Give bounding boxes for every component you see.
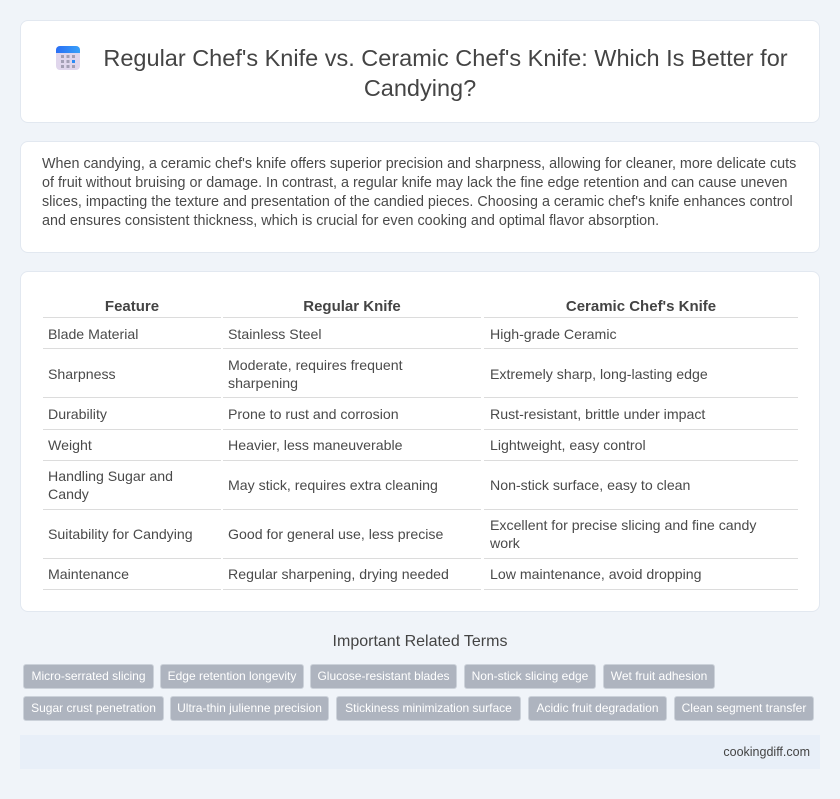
heading: related terms: Important Related Terms [333, 633, 507, 650]
row: weight: Heavier, less maneuverable [228, 437, 402, 453]
panel: title card [20, 20, 820, 123]
row: sharpness: Extremely sharp, long-lasting edge [490, 366, 708, 382]
text block: intro: slices, impacting the texture and presentation of the candied pieces. Choosing a ceramic chef's knife enhances control [42, 194, 793, 210]
related terms tags: Clean segment transfer [682, 701, 806, 715]
row: handling sugar and candy: Handling Sugar and [48, 468, 173, 484]
row: suitability for candying: Good for general use, less precise [228, 526, 443, 542]
related terms tags: Sugar crust penetration [31, 701, 156, 715]
text block: intro: of fruit without bruising or damage. In contrast, a regular knife may lack the fine edge retention and can cause uneven [42, 175, 788, 191]
table header: Ceramic Chef's Knife [566, 298, 716, 315]
related terms tags: Non-stick slicing edge [472, 669, 588, 683]
row: blade material [48, 326, 617, 342]
panel: intro text [20, 141, 820, 253]
row: handling sugar and candy: Candy [48, 486, 89, 502]
row: durability: Rust-resistant, brittle under impact [490, 406, 705, 422]
row: suitability for candying [48, 517, 756, 551]
row: durability: Durability [48, 406, 107, 422]
footer [20, 735, 820, 769]
panel: comparison table [20, 271, 820, 612]
row: maintenance: Low maintenance, avoid dropping [490, 566, 701, 582]
row: maintenance: Maintenance [48, 566, 129, 582]
related terms tags: Stickiness minimization surface [345, 701, 512, 715]
row: sharpness [48, 357, 708, 391]
row: weight: Weight [48, 437, 92, 453]
related terms tags: Ultra-thin julienne precision [177, 701, 322, 715]
row: suitability for candying: Suitability for Candying [48, 526, 193, 542]
title: Candying? [364, 75, 476, 101]
row: handling sugar and candy: Non-stick surface, easy to clean [490, 477, 690, 493]
row: blade material: Blade Material [48, 326, 138, 342]
row: sharpness: Moderate, requires frequent [228, 357, 403, 373]
title: Regular Chef's Knife vs. Ceramic Chef's Knife: Which Is Better for [103, 45, 788, 71]
footer: cookingdiff.com [723, 745, 810, 759]
row: handling sugar and candy: May stick, requires extra cleaning [228, 477, 438, 493]
table header [105, 298, 716, 315]
text block: intro: When candying, a ceramic chef's knife offers superior precision and sharpness, allowing for cleaner, more delicate cuts [42, 156, 796, 172]
row: maintenance: Regular sharpening, drying needed [228, 566, 449, 582]
row: blade material: Stainless Steel [228, 326, 322, 342]
table header: Feature [105, 298, 159, 315]
row: durability [48, 406, 706, 422]
row: weight: Lightweight, easy control [490, 437, 646, 453]
row: weight [48, 437, 646, 453]
row: durability: Prone to rust and corrosion [228, 406, 399, 422]
related terms tags: Glucose-resistant blades [317, 669, 450, 683]
row: handling sugar and candy [48, 468, 690, 502]
comparison table [43, 298, 798, 590]
row: sharpness: sharpening [228, 375, 298, 391]
row: sharpness: Sharpness [48, 366, 116, 382]
related terms tags: Acidic fruit degradation [536, 701, 659, 715]
related terms tags: Micro-serrated slicing [31, 669, 146, 683]
row: suitability for candying: work [490, 535, 520, 551]
related terms tags [23, 664, 814, 721]
text block: intro [42, 156, 796, 229]
related terms tags: Wet fruit adhesion [611, 669, 707, 683]
row: suitability for candying: Excellent for precise slicing and fine candy [490, 517, 756, 533]
related terms tags: Edge retention longevity [168, 669, 296, 683]
table header: Regular Knife [303, 298, 401, 315]
icon: calendar [56, 46, 80, 70]
row: blade material: High-grade Ceramic [490, 326, 617, 342]
title [103, 45, 788, 101]
text block: intro: and ensures consistent thickness, which is crucial for even cooking and optimal flavor absorption. [42, 213, 659, 229]
row: maintenance [48, 566, 701, 582]
